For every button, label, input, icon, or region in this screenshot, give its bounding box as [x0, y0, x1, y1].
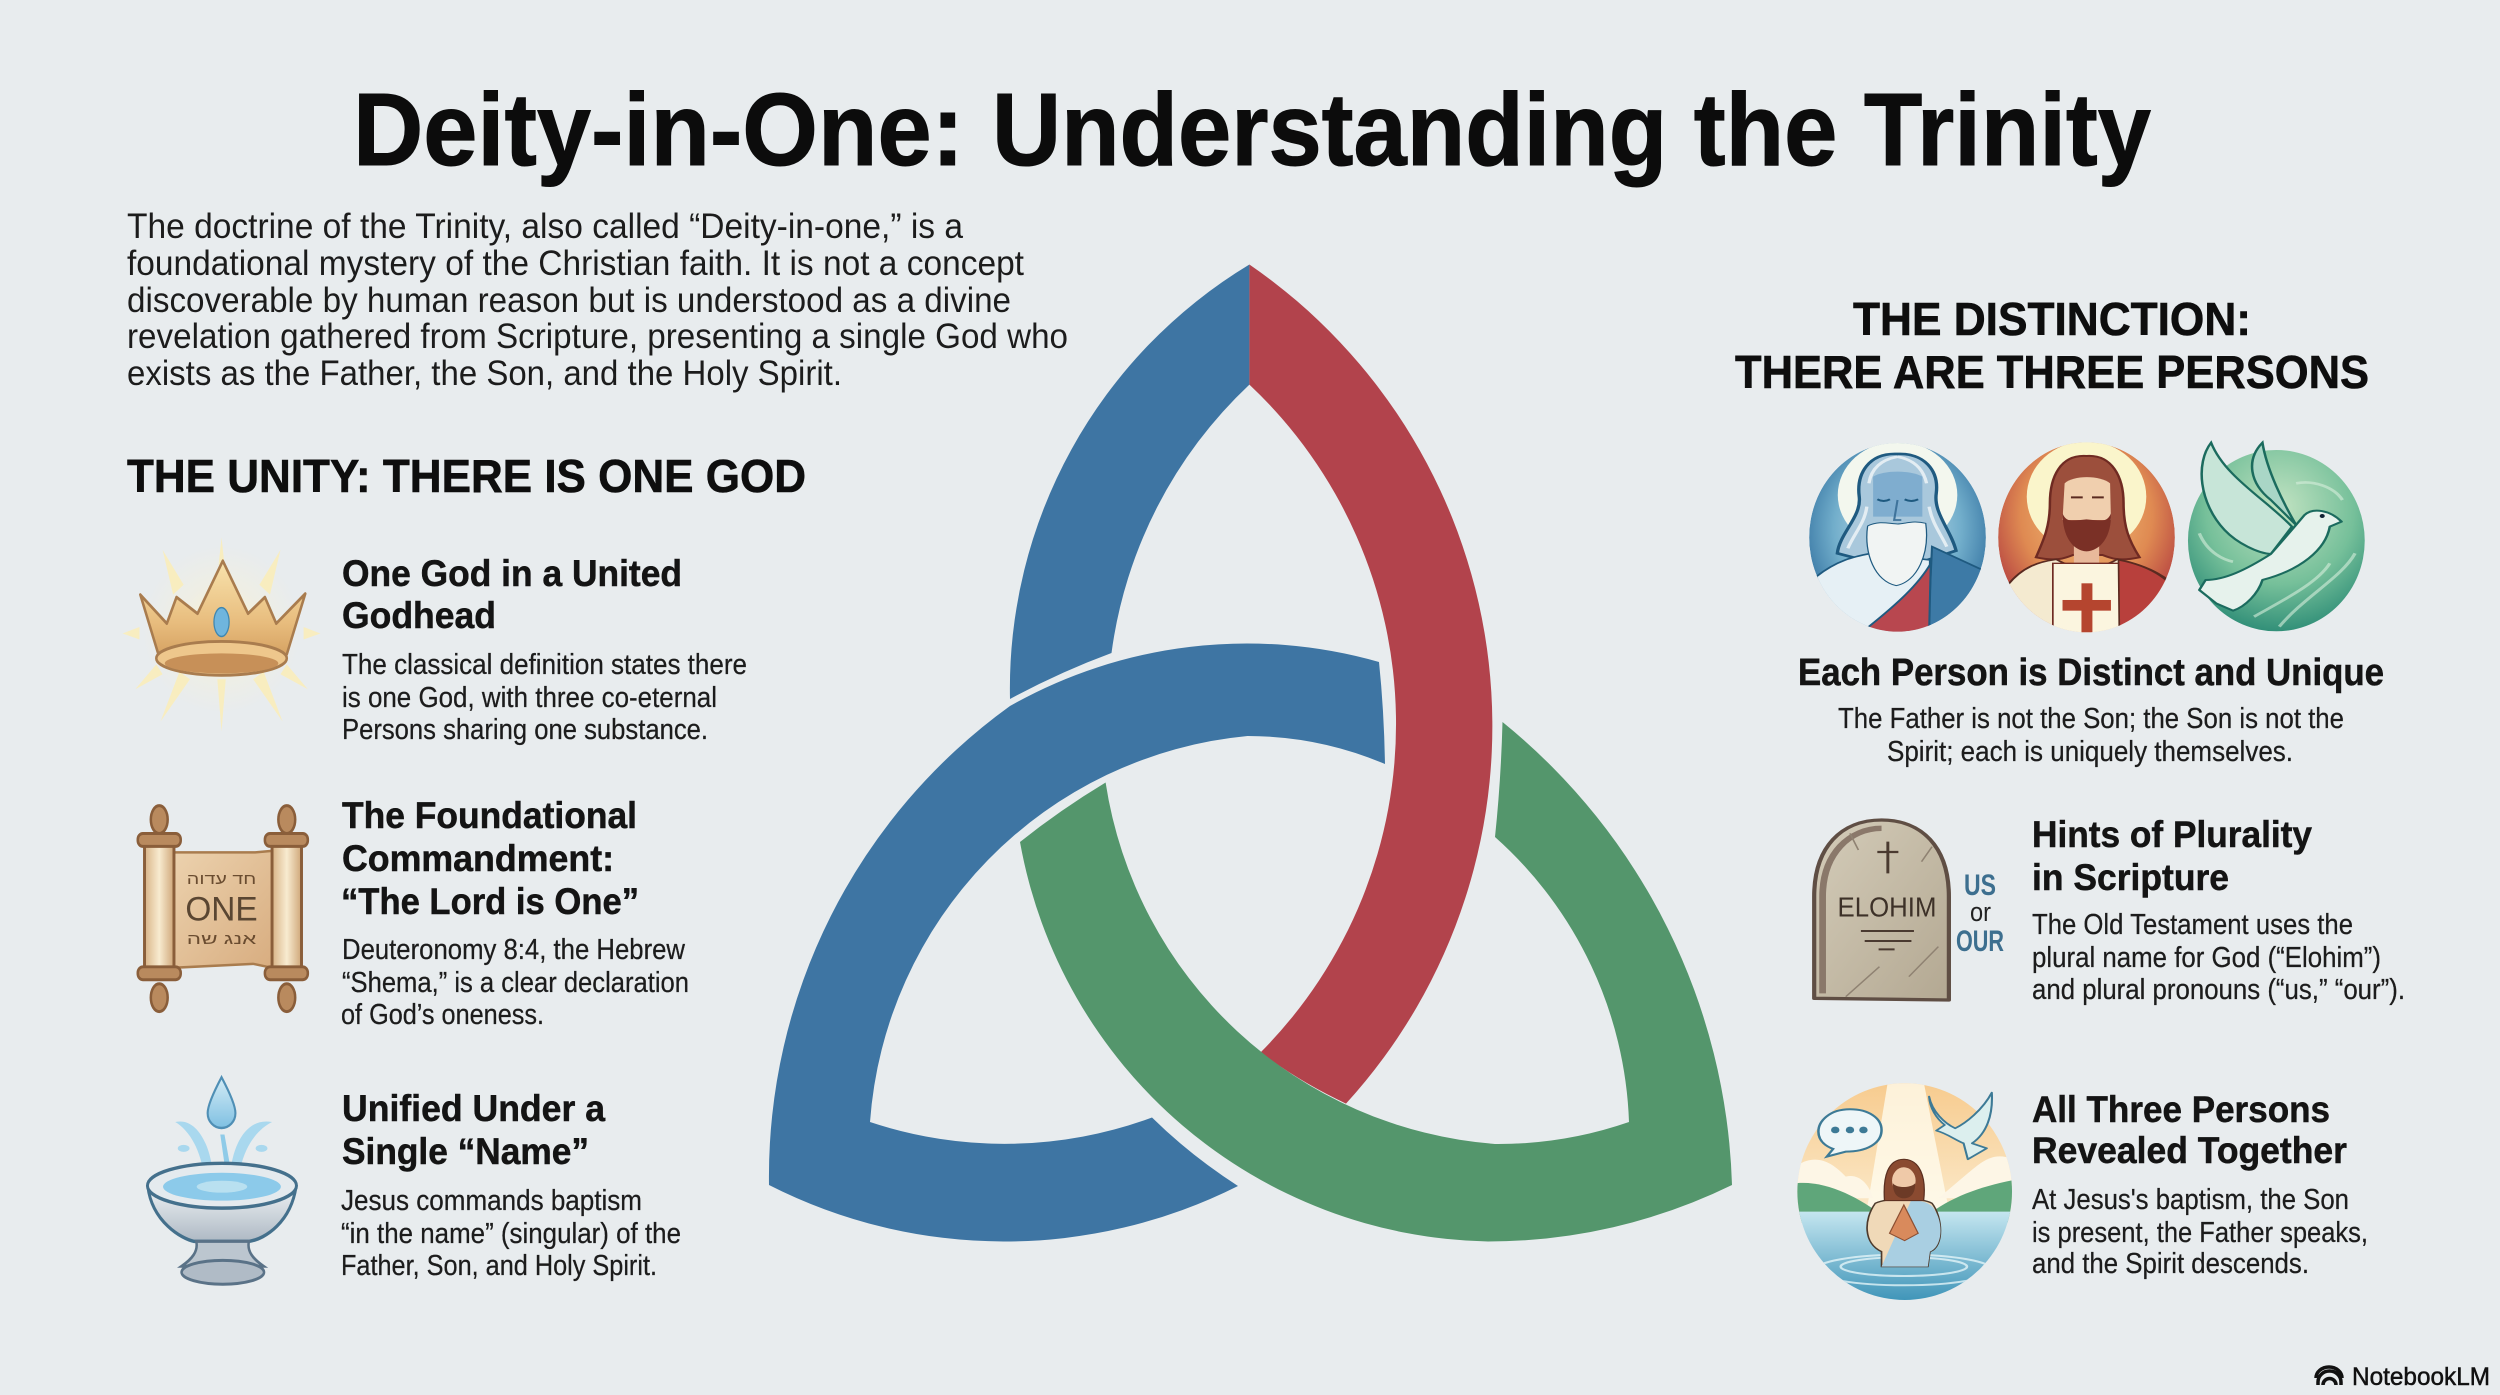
item: one god: Godhead: [342, 595, 496, 636]
icon: scroll: [138, 806, 308, 1012]
icon: Elohim stone tablet: [1814, 820, 1949, 1000]
intro text block: The doctrine of the Trinity, also called “Deity-in-one,” is a: [127, 207, 964, 246]
title: [353, 72, 2151, 187]
item: unified under a single name: [341, 1088, 681, 1282]
icon: Elohim stone tablet: ELOHIM: [1838, 892, 1936, 923]
blue main arc: [769, 643, 1385, 1241]
panel: the unity: [123, 450, 806, 1284]
item: one god: [342, 553, 747, 746]
item: hints of plurality: in Scripture: [2032, 857, 2229, 898]
item: foundational commandment: of God’s oneness.: [341, 999, 544, 1031]
item: unified under a single name: “in the name” (singular) of the: [341, 1218, 681, 1250]
intro text block: [127, 207, 1068, 393]
heading: the distinction: THE DISTINCTION:: [1853, 293, 2251, 345]
icon: scroll: ONE: [185, 890, 258, 928]
icon: baptismal font: [147, 1077, 296, 1284]
intro text block: revelation gathered from Scripture, presenting a single God who: [127, 317, 1068, 356]
icon: crown: [123, 537, 320, 731]
icon: baptism scene: [1795, 1082, 2014, 1302]
intro text block: exists as the Father, the Son, and the Holy Spirit.: [127, 354, 842, 393]
item: all three persons: [2032, 1089, 2368, 1280]
icon: portrait of the Father: [1809, 442, 1986, 633]
intro text block: foundational mystery of the Christian faith. It is not a concept: [127, 244, 1024, 283]
label: us or our: [1956, 869, 2004, 958]
item: hints of plurality: [2032, 814, 2405, 1006]
item: all three persons: and the Spirit descends.: [2032, 1248, 2309, 1280]
item: unified under a single name: Unified Under a: [342, 1088, 605, 1129]
item: each person is distinct: Spirit; each is uniquely themselves.: [1887, 736, 2293, 768]
item: foundational commandment: “The Lord is One”: [341, 881, 639, 922]
label: us or our: OUR: [1956, 925, 2004, 958]
item: foundational commandment: Commandment:: [342, 838, 614, 879]
trinity knot diagram: [769, 264, 1732, 1242]
item: one god: is one God, with three co-eternal: [342, 682, 717, 714]
title: Deity-in-One:: [353, 72, 964, 187]
item: all three persons: is present, the Father speaks,: [2032, 1217, 2368, 1249]
intro text block: discoverable by human reason but is understood as a divine: [127, 281, 1011, 320]
item: hints of plurality: and plural pronouns (“us,” “our”).: [2032, 974, 2405, 1006]
item: unified under a single name: Father, Son, and Holy Spirit.: [341, 1250, 657, 1282]
red arc: [1249, 264, 1492, 1104]
item: all three persons: At Jesus's baptism, the Son: [2032, 1184, 2349, 1216]
heading: the unity: THE UNITY: THERE IS ONE GOD: [127, 450, 806, 502]
item: foundational commandment: Deuteronomy 8:4, the Hebrew: [342, 934, 686, 966]
icon: scroll: חד עדוה: [187, 870, 256, 887]
icon: dove of the Spirit: [2188, 443, 2365, 631]
heading: the distinction: THERE ARE THREE PERSONS: [1735, 346, 2369, 398]
blue upper arc: [1010, 264, 1249, 699]
item: each person is distinct: Each Person is Distinct and Unique: [1798, 652, 2384, 694]
item: one god: Persons sharing one substance.: [342, 714, 708, 746]
panel: the distinction: [1735, 293, 2405, 1302]
icon: portrait of the Son: [1998, 441, 2175, 633]
icon: scroll: אנג שה: [187, 930, 257, 947]
item: foundational commandment: [341, 795, 689, 1031]
item: one god: The classical definition states there: [342, 649, 747, 681]
item: all three persons: Revealed Together: [2032, 1130, 2347, 1171]
label: us or our: US: [1964, 869, 1996, 902]
label: us or our: or: [1970, 897, 1991, 927]
item: hints of plurality: The Old Testament uses the: [2032, 909, 2353, 941]
item: each person is distinct: [1798, 652, 2384, 768]
NotebookLM logo: NotebookLM: [2352, 1363, 2490, 1391]
item: hints of plurality: Hints of Plurality: [2032, 814, 2312, 855]
title: Understanding the Trinity: [992, 72, 2151, 187]
item: all three persons: All Three Persons: [2032, 1089, 2330, 1130]
item: foundational commandment: The Foundational: [342, 795, 637, 836]
item: unified under a single name: Single “Name”: [342, 1131, 589, 1172]
item: each person is distinct: The Father is not the Son; the Son is not the: [1838, 703, 2344, 735]
green arc: [1020, 722, 1732, 1242]
item: unified under a single name: Jesus commands baptism: [341, 1185, 642, 1217]
item: one god: One God in a United: [342, 553, 682, 594]
item: hints of plurality: plural name for God (“Elohim”): [2032, 942, 2381, 974]
item: foundational commandment: “Shema,” is a clear declaration: [342, 967, 689, 999]
heading: the distinction: [1735, 293, 2369, 398]
